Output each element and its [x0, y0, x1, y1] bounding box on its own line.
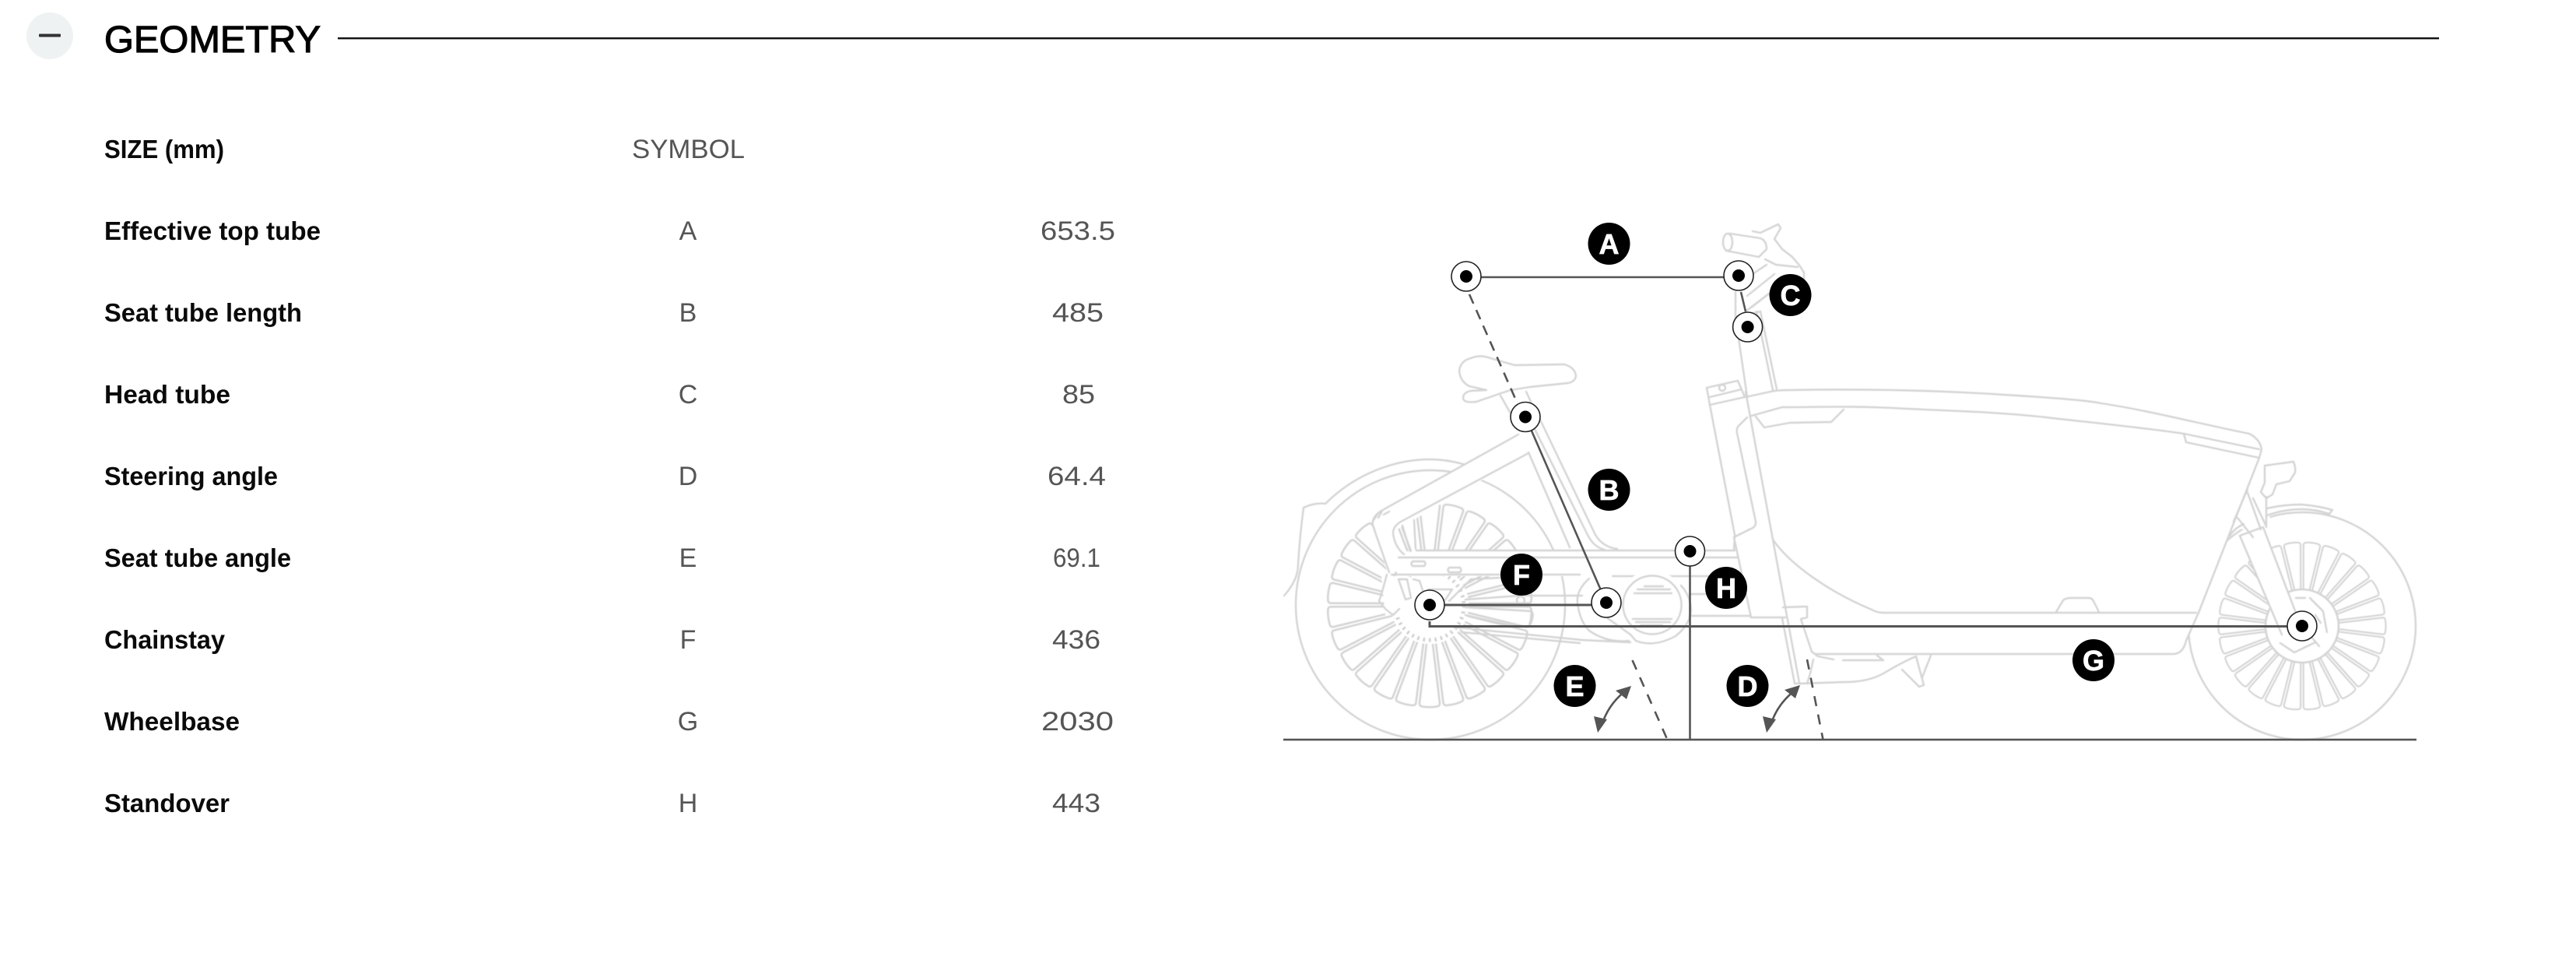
row: seat tube angle: [104, 543, 1100, 573]
H line: [1689, 551, 1691, 740]
front fork: [2234, 489, 2296, 638]
row: chainstay: [104, 625, 1100, 655]
row: standover: 443: [1052, 789, 1100, 818]
row: effective top tube: [104, 216, 1115, 246]
rear frame: [1372, 417, 1743, 580]
header rule: [338, 37, 2439, 39]
geometry table: [104, 135, 1115, 818]
table header row: [104, 135, 745, 164]
bike line drawing: [1284, 224, 2416, 740]
row: steering angle: 64.4: [1048, 462, 1106, 491]
row: standover: H: [679, 789, 697, 818]
row: seat tube angle: E: [679, 543, 697, 573]
row: wheelbase: [104, 707, 1114, 737]
badge H: H: [1716, 572, 1736, 604]
row: head tube: 85: [1062, 380, 1095, 410]
badge G: G: [2083, 645, 2104, 677]
table header row: SIZE (mm): [104, 135, 224, 164]
table header row: SYMBOL: [632, 135, 745, 164]
target dots: [1423, 269, 2308, 632]
row: wheelbase: Wheelbase: [104, 707, 240, 736]
target points: [1415, 261, 2317, 641]
title: GEOMETRY: [104, 19, 321, 61]
badge D: D: [1737, 670, 1757, 702]
F line: [1430, 604, 1606, 606]
front fender and light: [2230, 462, 2332, 536]
badge F: [1500, 554, 1542, 596]
rear fender: [1284, 459, 1463, 596]
badge D: [1726, 665, 1768, 707]
badge F: F: [1513, 559, 1530, 591]
row: head tube: Head tube: [104, 380, 230, 409]
row: wheelbase: 2030: [1041, 707, 1114, 737]
badge G: [2072, 639, 2114, 681]
E angle arrow: [1594, 686, 1631, 733]
C line: [1741, 292, 1746, 311]
A line: [1466, 276, 1739, 278]
badge E: E: [1565, 670, 1585, 702]
collapse button icon: [26, 12, 73, 59]
row: seat tube length: [104, 298, 1104, 328]
row: wheelbase: G: [678, 707, 698, 737]
ground line: [1283, 739, 2416, 740]
row: head tube: [104, 380, 1095, 410]
E dashed angle line: [1633, 660, 1667, 739]
row: seat tube length: 485: [1052, 298, 1104, 328]
badge H: [1705, 567, 1747, 609]
G line: [1430, 621, 2302, 626]
row: seat tube length: B: [679, 298, 697, 328]
kickstand and foot: [1782, 607, 1931, 687]
row: chainstay: Chainstay: [104, 625, 226, 654]
row: standover: [104, 789, 1100, 818]
row: steering angle: Steering angle: [104, 462, 278, 491]
badge B: [1588, 469, 1630, 511]
B line: [1525, 417, 1606, 603]
D angle arrow: [1763, 685, 1800, 733]
badge A: A: [1599, 228, 1619, 260]
badge B: B: [1599, 474, 1619, 506]
row: steering angle: D: [679, 462, 697, 491]
row: head tube: C: [679, 380, 697, 410]
rear wheel: [1296, 470, 1565, 740]
row: effective top tube: Effective top tube: [104, 216, 321, 245]
row: steering angle: [104, 462, 1106, 491]
section header: [26, 12, 2439, 61]
row: chainstay: F: [680, 625, 696, 655]
D dashed angle line: [1807, 659, 1823, 740]
rear dropout and caliper: [1379, 575, 1630, 643]
handlebar and brake: [1723, 224, 1804, 317]
row: seat tube angle: Seat tube angle: [104, 543, 291, 572]
row: seat tube length: Seat tube length: [104, 298, 302, 327]
motor and chainring: [1578, 571, 1750, 643]
badge C: C: [1781, 280, 1801, 311]
B dashed extension: [1469, 294, 1521, 413]
saddle and seat post: [1459, 357, 1576, 413]
row: chainstay: 436: [1052, 625, 1100, 655]
badge A: [1588, 223, 1630, 265]
front wheel: [2188, 512, 2416, 740]
badge E: [1553, 665, 1595, 707]
cargo box: [1712, 389, 2262, 654]
measurements: [1415, 223, 2317, 740]
main column and head tube: [1707, 311, 1799, 684]
row: effective top tube: A: [679, 216, 697, 246]
row: seat tube angle: 69.1: [1053, 543, 1100, 573]
row: standover: Standover: [104, 789, 230, 818]
badge C: [1770, 274, 1812, 316]
row: effective top tube: 653.5: [1041, 216, 1115, 246]
